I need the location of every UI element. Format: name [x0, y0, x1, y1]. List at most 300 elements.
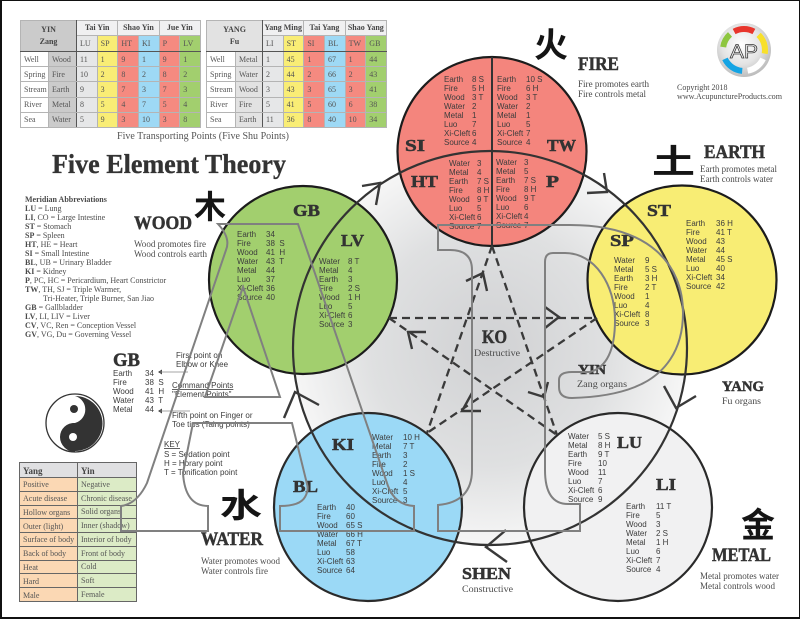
- text block: meridian abbreviations: Tri-Heater, Triple Burner, San Jiao: [43, 294, 154, 303]
- LV points: Wood: [319, 293, 340, 302]
- table: Yang Fu five transporting points: 38: [369, 100, 377, 109]
- Metal heading: Metal promotes water: [700, 571, 779, 581]
- LV points: Metal: [319, 266, 339, 275]
- Earth heading: Earth promotes metal: [700, 164, 777, 174]
- table: Yin Zang five transporting points: P: [163, 39, 167, 48]
- Fire meridian labels: HT: [411, 172, 439, 191]
- SI points: 1: [472, 111, 477, 120]
- SP points: Xi-Cleft: [614, 310, 641, 319]
- table: Yin Zang five transporting points: KI: [142, 39, 150, 48]
- BL points: Water: [317, 530, 338, 539]
- table: Yang Fu five transporting points: Tai Yang: [310, 23, 339, 32]
- table: Yang Fu five transporting points: River: [210, 100, 228, 109]
- table: Yin Zang five transporting points: Jue Yin: [167, 23, 193, 32]
- BL points: 58: [346, 548, 355, 557]
- notes: first point and command points: Toe tips (Taing points): [172, 420, 250, 429]
- table: Yin Zang five transporting points: 3: [163, 115, 167, 124]
- circle: Metal: [524, 413, 712, 601]
- Metal meridian labels: LU: [617, 433, 642, 452]
- ST points: 40: [716, 264, 725, 273]
- HT points: 7: [477, 222, 482, 231]
- table: Yang Fu five transporting points: 65: [328, 85, 336, 94]
- TW points: Water: [497, 102, 518, 111]
- TW points: 10 S: [526, 75, 542, 84]
- P points: 7 S: [524, 176, 536, 185]
- background circle: Shen cycle: [293, 151, 687, 545]
- GB points: Wood: [237, 248, 258, 257]
- KI points: 3: [403, 451, 408, 460]
- table: Yang Fu five transporting points: Sea: [210, 115, 222, 124]
- SP points: Source: [614, 319, 640, 328]
- KI points: 3: [403, 496, 408, 505]
- TW points: 6 H: [526, 84, 539, 93]
- LV points: Source: [319, 320, 345, 329]
- table: Yin Zang five transporting points: 8: [163, 70, 167, 79]
- SP points: Fire: [614, 283, 628, 292]
- GB legend: 38 S: [145, 378, 164, 387]
- key: [164, 440, 238, 477]
- GB legend: [113, 350, 190, 414]
- table: Yin Zang five transporting points: Wood: [52, 55, 71, 64]
- GB points: Xi-Cleft: [237, 284, 264, 293]
- Wood meridian labels: GB: [293, 201, 320, 220]
- ST points: Water: [686, 246, 707, 255]
- Earth meridian labels: SP: [610, 231, 634, 250]
- table: Yang and Yin qualities: Heat: [23, 563, 38, 572]
- table: Yin Zang five transporting points: Spring: [24, 70, 45, 79]
- LU points: 5 S: [598, 432, 610, 441]
- HT points: 9 T: [477, 195, 489, 204]
- BL points: Wood: [317, 521, 338, 530]
- Metal heading: METAL: [712, 545, 771, 566]
- GB legend: 44: [145, 405, 154, 414]
- table: Yang and Yin qualities: Yang: [23, 466, 43, 476]
- TW points: Source: [497, 138, 523, 147]
- P points: 4: [524, 212, 529, 221]
- text block: meridian abbreviations: SP = Spleen: [25, 231, 65, 240]
- table: Yang and Yin qualities: [19, 462, 137, 602]
- GB legend: Metal: [113, 405, 133, 414]
- LV points: 6: [348, 311, 353, 320]
- text block: meridian abbreviations: P, PC, HC = Pericardium, Heart Constrictor: [25, 276, 166, 285]
- GB points: 44: [266, 266, 275, 275]
- TW points: 2: [526, 102, 531, 111]
- table: Yang Fu five transporting points: 1: [349, 55, 353, 64]
- Metal heading: [700, 498, 779, 591]
- LV points: Fire: [319, 284, 333, 293]
- SP points: 1: [645, 292, 650, 301]
- LV points: 5: [348, 302, 353, 311]
- logo: Acupuncture Products: AP: [730, 42, 758, 63]
- table: Yang Fu five transporting points: 40: [328, 115, 336, 124]
- table: Yin Zang five transporting points: [20, 20, 201, 128]
- Shen cycle ring: [293, 151, 687, 545]
- KI points: 7 T: [403, 442, 415, 451]
- SI points: Earth: [444, 75, 463, 84]
- LV points: 1 H: [348, 293, 361, 302]
- LU points: 10: [598, 459, 607, 468]
- LI points: Luo: [626, 547, 640, 556]
- GB points: Metal: [237, 266, 257, 275]
- GB points: Source: [237, 293, 263, 302]
- Wood heading: [134, 182, 226, 259]
- text block: meridian abbreviations: GV, VG, Du = Governing Vessel: [25, 330, 132, 339]
- KI points: Metal: [372, 442, 392, 451]
- table: Yang Fu five transporting points: Fire: [239, 100, 252, 109]
- notes: first point and command points: Command Points: [172, 381, 233, 390]
- GB legend: 34: [145, 369, 154, 378]
- ST points: 42: [716, 282, 725, 291]
- table: Yang Fu five transporting points: 8: [307, 115, 311, 124]
- P points: 3: [524, 158, 529, 167]
- BL points: 64: [346, 566, 355, 575]
- Metal heading: 金: [741, 498, 775, 547]
- TW points: Metal: [497, 111, 517, 120]
- label: Ko destructive: Destructive: [474, 348, 520, 358]
- HT points: 7 S: [477, 177, 489, 186]
- text block: meridian abbreviations: GB = Gallbladder: [25, 303, 83, 312]
- Ko destructive dashed star: [389, 246, 597, 435]
- SP points: Water: [614, 256, 635, 265]
- table: Yin Zang five transporting points: River: [24, 100, 42, 109]
- label: Yang Fu organs: Fu organs: [722, 396, 762, 406]
- SP points: Wood: [614, 292, 635, 301]
- GB legend: GB: [113, 350, 140, 371]
- TW points: Xi-Cleft: [497, 129, 524, 138]
- BL points: Fire: [317, 512, 331, 521]
- P points: Source: [496, 221, 522, 230]
- SI points: Wood: [444, 93, 465, 102]
- table: Yin Zang five transporting points: LV: [183, 39, 193, 48]
- text block: meridian abbreviations: Meridian Abbreviations: [25, 195, 107, 204]
- table: Yin Zang five transporting points: 10: [142, 115, 150, 124]
- P points: 5: [524, 167, 529, 176]
- LU points: Earth: [568, 450, 587, 459]
- table: Yang Fu five transporting points: GB: [369, 39, 380, 48]
- logo: Acupuncture Products: [717, 23, 771, 77]
- circle: Water: [274, 413, 462, 601]
- P points: 8 H: [524, 185, 537, 194]
- SI points: 8 S: [472, 75, 484, 84]
- BL points: 40: [346, 503, 355, 512]
- Metal heading: Metal controls wood: [700, 581, 775, 591]
- GB points: Fire: [237, 239, 251, 248]
- LU points: 6: [598, 486, 603, 495]
- LI points: 11 T: [656, 502, 671, 511]
- LI points: Earth: [626, 502, 645, 511]
- ST points: Wood: [686, 237, 707, 246]
- table: Yang and Yin qualities: Outer (light): [23, 522, 63, 531]
- SP points: 5 S: [645, 265, 657, 274]
- Wood meridian labels: LV: [341, 231, 365, 250]
- SP points: 9: [645, 256, 650, 265]
- SI points: Fire: [444, 84, 458, 93]
- ST points: Luo: [686, 264, 700, 273]
- table: Yang Fu five transporting points: Spring: [210, 70, 231, 79]
- table: Yang and Yin qualities: Hard: [23, 577, 39, 586]
- P points: 6: [524, 203, 529, 212]
- BL points: Luo: [317, 548, 331, 557]
- table: Yin Zang five transporting points: 4: [121, 100, 125, 109]
- HT points: 5: [477, 204, 482, 213]
- table: Yin Zang five transporting points: 9: [121, 55, 125, 64]
- table: Yin Zang five transporting points: 9: [101, 115, 105, 124]
- Earth meridian labels: [610, 201, 672, 250]
- LV points: Xi-Cleft: [319, 311, 346, 320]
- table: Yin Zang five transporting points: Shao Yin: [123, 23, 154, 32]
- table: Yang Fu five transporting points: 41: [369, 85, 377, 94]
- table: Yin Zang five transporting points: 3: [121, 115, 125, 124]
- BL points: 65 S: [346, 521, 362, 530]
- table: Yang Fu five transporting points: Yang Ming: [264, 23, 302, 32]
- text block: meridian abbreviations: LU = Lung: [25, 204, 62, 213]
- SI points: 2: [472, 102, 477, 111]
- ST points: 41 T: [716, 228, 732, 237]
- Fire heading: 火: [534, 18, 568, 67]
- table: Yang Fu five transporting points: 41: [287, 100, 295, 109]
- LV points: Water: [319, 257, 340, 266]
- table: Yin Zang five transporting points: 7: [121, 85, 125, 94]
- GB points: 38 S: [266, 239, 285, 248]
- table: Yang Fu five transporting points: YANG: [223, 25, 246, 34]
- table: Yin Zang five transporting points: Tai Yin: [85, 23, 110, 32]
- BL points: 66 H: [346, 530, 363, 539]
- ST points: 34: [716, 273, 725, 282]
- table: Yin Zang five transporting points: 8: [80, 100, 84, 109]
- notes: first point and command points: Elbow or Knee: [176, 360, 229, 369]
- notes: first point and command points: [172, 351, 253, 429]
- table: Yin Zang five transporting points: Sea: [24, 115, 36, 124]
- GB points: Earth: [237, 230, 256, 239]
- Wood meridian labels: [293, 201, 365, 250]
- table: Yang Fu five transporting points: 43: [369, 70, 377, 79]
- LI points: Wood: [626, 520, 647, 529]
- Fire meridian labels: SI: [405, 136, 425, 155]
- table: Yin Zang five transporting points: 1: [183, 55, 187, 64]
- table: Yin Zang five transporting points: YIN: [41, 25, 56, 34]
- Water heading: 水: [220, 479, 262, 527]
- Wood heading: Wood controls earth: [134, 249, 207, 259]
- table: Yang Fu five transporting points: Wood: [239, 85, 258, 94]
- BL points: 60: [346, 512, 355, 521]
- Yin grey outline path: [438, 225, 683, 531]
- table: Yang Fu five transporting points: 10: [349, 115, 357, 124]
- LI points: Metal: [626, 538, 646, 547]
- BL points: Xi-Cleft: [317, 557, 344, 566]
- LU points: 7: [598, 477, 603, 486]
- table: Yin Zang five transporting points: Water: [52, 115, 71, 124]
- table: Yin Zang five transporting points: Earth: [52, 85, 69, 94]
- ST points: 36 H: [716, 219, 733, 228]
- LI points: Source: [626, 565, 652, 574]
- SP points: Metal: [614, 265, 634, 274]
- ST points: Earth: [686, 219, 705, 228]
- circle: Wood: [209, 186, 397, 374]
- table: Yang Fu five transporting points: Shao Yang: [348, 23, 384, 32]
- text block: meridian abbreviations: [25, 195, 166, 339]
- GB legend: Water: [113, 396, 134, 405]
- LI points: Xi-Cleft: [626, 556, 653, 565]
- KI points: Wood: [372, 469, 393, 478]
- LV points: 2 S: [348, 284, 360, 293]
- HT points: 3: [477, 159, 482, 168]
- table: Yang Fu five transporting points: 44: [287, 70, 295, 79]
- LU points: 8 H: [598, 441, 611, 450]
- GB points: 43 T: [266, 257, 284, 266]
- circle: Earth: [588, 186, 776, 374]
- LI points: Fire: [626, 511, 640, 520]
- text block: meridian abbreviations: BL, UB = Urinary Bladder: [25, 258, 112, 267]
- table: Yang Fu five transporting points: 3: [307, 85, 311, 94]
- SI points: 4: [472, 138, 477, 147]
- key: T = Tonification point: [164, 468, 238, 477]
- ST points: 43: [716, 237, 725, 246]
- KI points: 2: [403, 460, 408, 469]
- text block: meridian abbreviations: SI = Small Intestine: [25, 249, 90, 258]
- Water meridian labels: [293, 435, 354, 496]
- copyright: [677, 83, 783, 101]
- TW points: 3 T: [526, 93, 538, 102]
- ST points: 45 S: [716, 255, 732, 264]
- notes: first point and command points: "Element Points": [172, 390, 232, 399]
- LV points: 4: [348, 266, 353, 275]
- table: Yang Fu five transporting points: 45: [287, 55, 295, 64]
- table: Yang Fu five transporting points: 3: [266, 85, 270, 94]
- Water meridian labels: KI: [332, 435, 354, 454]
- table: Yang and Yin qualities: Back of body: [23, 549, 66, 558]
- KI points: Fire: [372, 460, 386, 469]
- table: Yin Zang five transporting points: 7: [142, 100, 146, 109]
- TW points: 5: [526, 120, 531, 129]
- table: Yang and Yin qualities: Cold: [81, 562, 97, 571]
- LU points: Wood: [568, 468, 589, 477]
- table: Yin Zang five transporting points: HT: [121, 39, 132, 48]
- table: Yin Zang five transporting points: 10: [80, 70, 88, 79]
- table: Yang and Yin qualities: Negative: [81, 480, 110, 489]
- table: Yang Fu five transporting points: 2: [349, 70, 353, 79]
- table: Yang and Yin qualities: Male: [23, 591, 39, 600]
- Water heading: Water promotes wood: [201, 556, 280, 566]
- P points: 7: [524, 221, 529, 230]
- LI points: 6: [656, 547, 661, 556]
- Yang grey triangle path: [205, 287, 280, 397]
- icon: yin yang: [46, 394, 104, 452]
- table: Yang and Yin qualities: Surface of body: [23, 535, 74, 544]
- table: Yang Fu five transporting points: Fu: [230, 37, 239, 46]
- label: Ko destructive: KO: [482, 327, 507, 348]
- key: H = Horary point: [164, 459, 223, 468]
- table: Yang and Yin qualities: Inner (shadow): [81, 521, 130, 530]
- Water heading: WATER: [201, 529, 263, 550]
- Fire heading: Fire controls metal: [578, 89, 646, 99]
- LV points: 8 T: [348, 257, 360, 266]
- table: Yang Fu five transporting points: 34: [369, 115, 377, 124]
- HT points: Wood: [449, 195, 470, 204]
- LV points: Luo: [319, 302, 333, 311]
- table: Yang Fu five transporting points: SI: [307, 39, 314, 48]
- LU points: Luo: [568, 477, 582, 486]
- GB points: 36: [266, 284, 275, 293]
- table: Yin Zang five transporting points: 8: [121, 70, 125, 79]
- SI points: Xi-Cleft: [444, 129, 471, 138]
- SI points: 3 T: [472, 93, 484, 102]
- table: Yang Fu five transporting points: TW: [349, 39, 361, 48]
- Fire heading: FIRE: [578, 54, 619, 75]
- table: Yang Fu five transporting points: ST: [287, 39, 296, 48]
- BL points: Earth: [317, 503, 336, 512]
- KI points: Source: [372, 496, 398, 505]
- TW points: Fire: [497, 84, 511, 93]
- ST points: Xi-Cleft: [686, 273, 713, 282]
- P points: 9 T: [524, 194, 536, 203]
- LI points: 3: [656, 520, 661, 529]
- table: Yang Fu five transporting points: 6: [349, 100, 353, 109]
- table: Yang and Yin qualities: Acute disease: [23, 494, 67, 503]
- table: Yin Zang five transporting points: 2: [101, 70, 105, 79]
- table: Yin Zang five transporting points: Well: [24, 55, 39, 64]
- Fire meridian labels: [405, 136, 576, 191]
- table: Yin Zang five transporting points: Metal: [52, 100, 71, 109]
- table: Yang Fu five transporting points: Earth: [239, 115, 256, 124]
- SI points: 6: [472, 129, 477, 138]
- table: Yin Zang five transporting points: 3: [183, 85, 187, 94]
- label: Yang Fu organs: YANG: [722, 379, 764, 395]
- TW points: 1: [526, 111, 531, 120]
- KI points: 5: [403, 487, 408, 496]
- table: Yang and Yin qualities: Soft: [81, 576, 94, 585]
- LI points: 1 H: [656, 538, 669, 547]
- SP points: 3 H: [645, 274, 658, 283]
- table: Yang Fu five transporting points: LI: [266, 39, 274, 48]
- BL points: Metal: [317, 539, 337, 548]
- SP points: 3: [645, 319, 650, 328]
- ST points: 44: [716, 246, 725, 255]
- table: Yang and Yin qualities: Female: [81, 590, 105, 599]
- table: Yang Fu five transporting points: Metal: [239, 55, 258, 64]
- TW points: Wood: [497, 93, 518, 102]
- P points: Water: [496, 158, 517, 167]
- table: Yang Fu five transporting points: Water: [239, 70, 258, 79]
- LV points: 3: [348, 320, 353, 329]
- HT points: Fire: [449, 186, 463, 195]
- table: Yin Zang five transporting points: 3: [142, 85, 146, 94]
- LI points: 4: [656, 565, 661, 574]
- table: Yang Fu five transporting points: 60: [328, 100, 336, 109]
- Water heading: Water controls fire: [201, 566, 268, 576]
- text block: meridian abbreviations: LI, CO = Large Intestine: [25, 213, 106, 222]
- table: Yin Zang five transporting points: 1: [142, 55, 146, 64]
- Fire heading: Fire promotes earth: [578, 79, 649, 89]
- label: Yin Zang organs: Zang organs: [577, 379, 628, 389]
- title: Five Element Theory: [52, 149, 286, 179]
- SI points: 7: [472, 120, 477, 129]
- KI points: 1 S: [403, 469, 415, 478]
- Water meridian labels: BL: [293, 477, 318, 496]
- ST points: Source: [686, 282, 712, 291]
- TW points: 4: [526, 138, 531, 147]
- table: Yang and Yin qualities: Positive: [23, 480, 49, 489]
- HT points: Luo: [449, 204, 463, 213]
- table: Yang Fu five transporting points: 1: [266, 55, 270, 64]
- notes: first point and command points: First point on: [176, 351, 222, 360]
- table: Yang Fu five transporting points: BL: [328, 39, 338, 48]
- table: Yang and Yin qualities: Hollow organs: [23, 508, 70, 517]
- HT points: Earth: [449, 177, 468, 186]
- BL points: 63: [346, 557, 355, 566]
- table: Yin Zang five transporting points: 2: [142, 70, 146, 79]
- SP points: Luo: [614, 301, 628, 310]
- SI points: 5 H: [472, 84, 485, 93]
